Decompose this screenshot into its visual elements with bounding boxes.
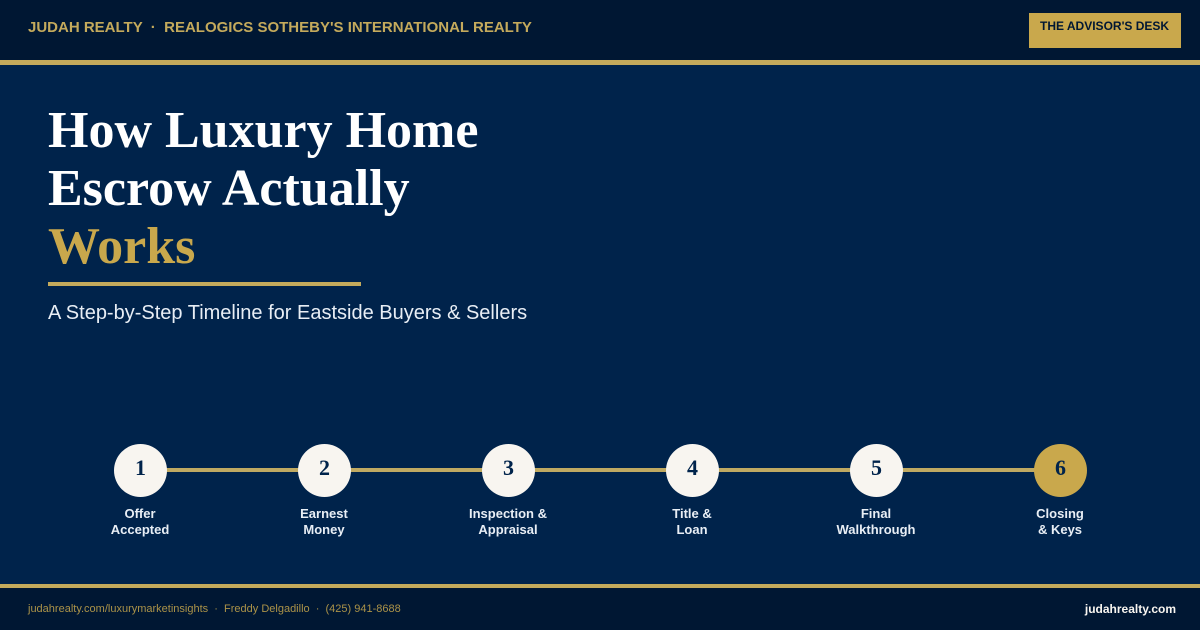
step 6 marker — [1034, 444, 1087, 497]
title — [48, 102, 478, 275]
step 4 marker — [666, 444, 719, 497]
step 4 label: Loan — [676, 522, 708, 537]
step 1 label — [111, 506, 169, 537]
badge: the advisor's desk — [1029, 13, 1181, 48]
timeline — [111, 444, 1087, 537]
step 4 label: Title & — [672, 506, 712, 521]
step 6 label: Closing — [1036, 506, 1084, 521]
header brand text: JUDAH REALTY · REALOGICS SOTHEBY'S INTERNATIONAL REALTY — [28, 19, 532, 36]
step 3 label: Inspection & — [469, 506, 547, 521]
step 2 marker — [298, 444, 351, 497]
badge: the advisor's desk: THE ADVISOR'S DESK — [1040, 19, 1169, 33]
step 1 marker: 1 — [135, 455, 146, 480]
step 2 label: Earnest — [300, 506, 348, 521]
step 5 label: Final — [861, 506, 891, 521]
step 6 marker: 6 — [1055, 455, 1066, 480]
timeline connector line — [140, 468, 1060, 472]
footer website: judahrealty.com — [1085, 602, 1176, 616]
step 6 label — [1036, 506, 1084, 537]
title: Works — [48, 218, 195, 275]
step 5 marker: 5 — [871, 455, 882, 480]
title underline — [48, 282, 361, 286]
step 5 marker — [850, 444, 903, 497]
step 2 label: Money — [303, 522, 345, 537]
step 3 label: Appraisal — [478, 522, 538, 537]
header bar — [0, 0, 1200, 65]
step 1 label: Offer — [124, 506, 156, 521]
step 3 marker — [482, 444, 535, 497]
step 2 marker: 2 — [319, 455, 330, 480]
step 5 label — [836, 506, 915, 537]
step 3 marker: 3 — [503, 455, 514, 480]
footer contact text: judahrealty.com/luxurymarketinsights · Freddy Delgadillo · (425) 941-8688 — [28, 603, 401, 615]
footer bar — [0, 584, 1200, 630]
step 2 label — [300, 506, 348, 537]
step 3 label — [469, 506, 547, 537]
step 5 label: Walkthrough — [837, 522, 915, 537]
subtitle: A Step-by-Step Timeline for Eastside Buyers & Sellers — [48, 302, 527, 324]
title: How Luxury Home — [48, 102, 478, 159]
step 1 label: Accepted — [111, 522, 169, 537]
title: Escrow Actually — [48, 160, 410, 217]
step 1 marker — [114, 444, 167, 497]
step 6 label: & Keys — [1038, 522, 1082, 537]
step 4 marker: 4 — [687, 455, 698, 480]
step 4 label — [672, 506, 712, 537]
